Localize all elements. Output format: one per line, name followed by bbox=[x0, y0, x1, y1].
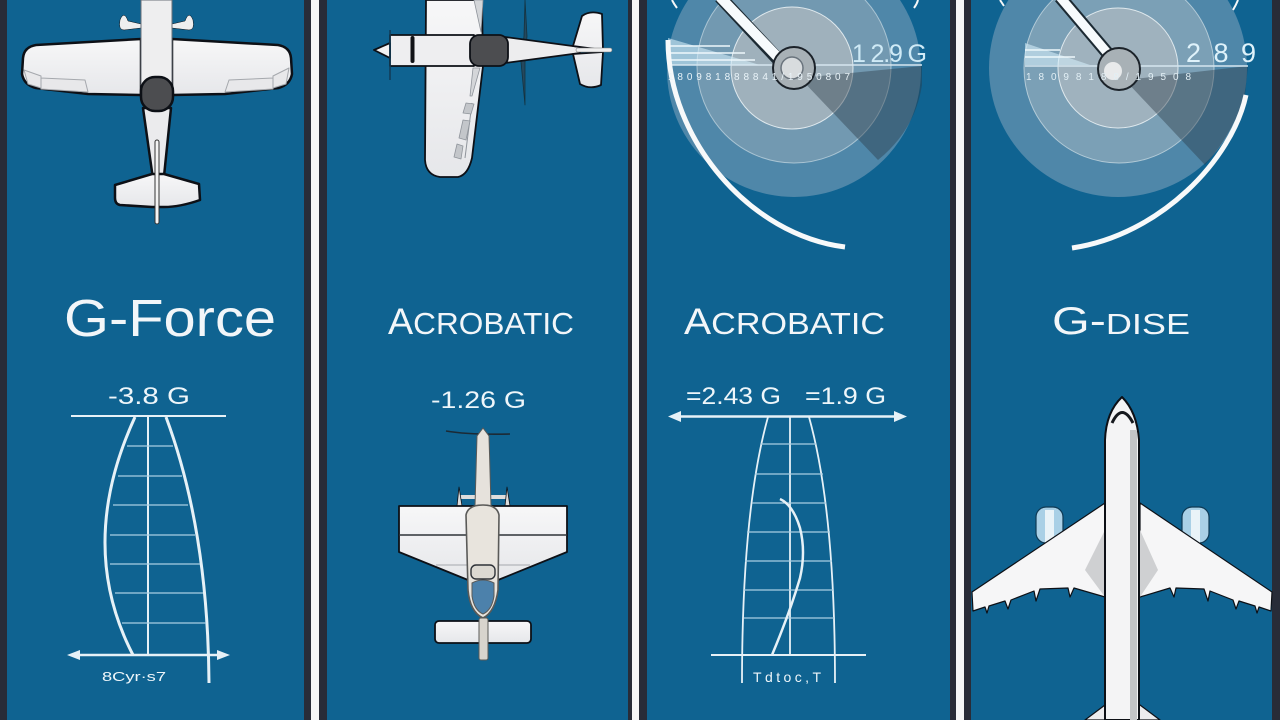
panel: Acrobatic 2 bbox=[667, 0, 927, 685]
icon: low-wing trainer plane bbox=[399, 428, 567, 660]
chart value: top: -3.8 G bbox=[108, 383, 190, 410]
gauge dial bbox=[667, 0, 927, 247]
icon: airliner bbox=[972, 397, 1272, 720]
panel: G-Force bbox=[22, 0, 292, 684]
gauge tick labels: 1 8 0 9 8 1 8 8 8 8 4 1 / 1 9 5 0 8 0 7 bbox=[668, 72, 850, 83]
chart: G envelope bbox=[67, 383, 230, 684]
panel: Acrobatic 1 bbox=[374, 0, 612, 660]
chart caption: 8Cyr·s7 bbox=[102, 669, 166, 684]
heading: Acrobatic: ACROBATIC bbox=[684, 301, 885, 342]
heading: G-Dise: G- DISE bbox=[1052, 300, 1190, 343]
panel: G-Dise bbox=[972, 0, 1272, 720]
gauge value: 1 2.9 G bbox=[852, 40, 927, 68]
heading: Acrobatic: ACROBATIC bbox=[388, 301, 574, 342]
chart: G envelope with curve bbox=[668, 383, 907, 685]
chart value: right: =1.9 G bbox=[805, 383, 886, 410]
icon: side-on plane bbox=[374, 0, 612, 177]
chart value: left: =2.43 G bbox=[686, 383, 781, 410]
chart caption: Tdtoc,T bbox=[753, 669, 821, 685]
icon: top-view aerobatic plane bbox=[22, 0, 292, 224]
gauge tick labels: 1 8 0 9 8 1 8 8 / 1 9 5 0 8 bbox=[1026, 72, 1191, 83]
heading: G-Force: G-Force bbox=[64, 290, 276, 348]
gauge dial bbox=[989, 0, 1256, 248]
gauge value: 2 8 9 bbox=[1186, 38, 1256, 68]
chart value: -1.26 G bbox=[431, 387, 526, 414]
